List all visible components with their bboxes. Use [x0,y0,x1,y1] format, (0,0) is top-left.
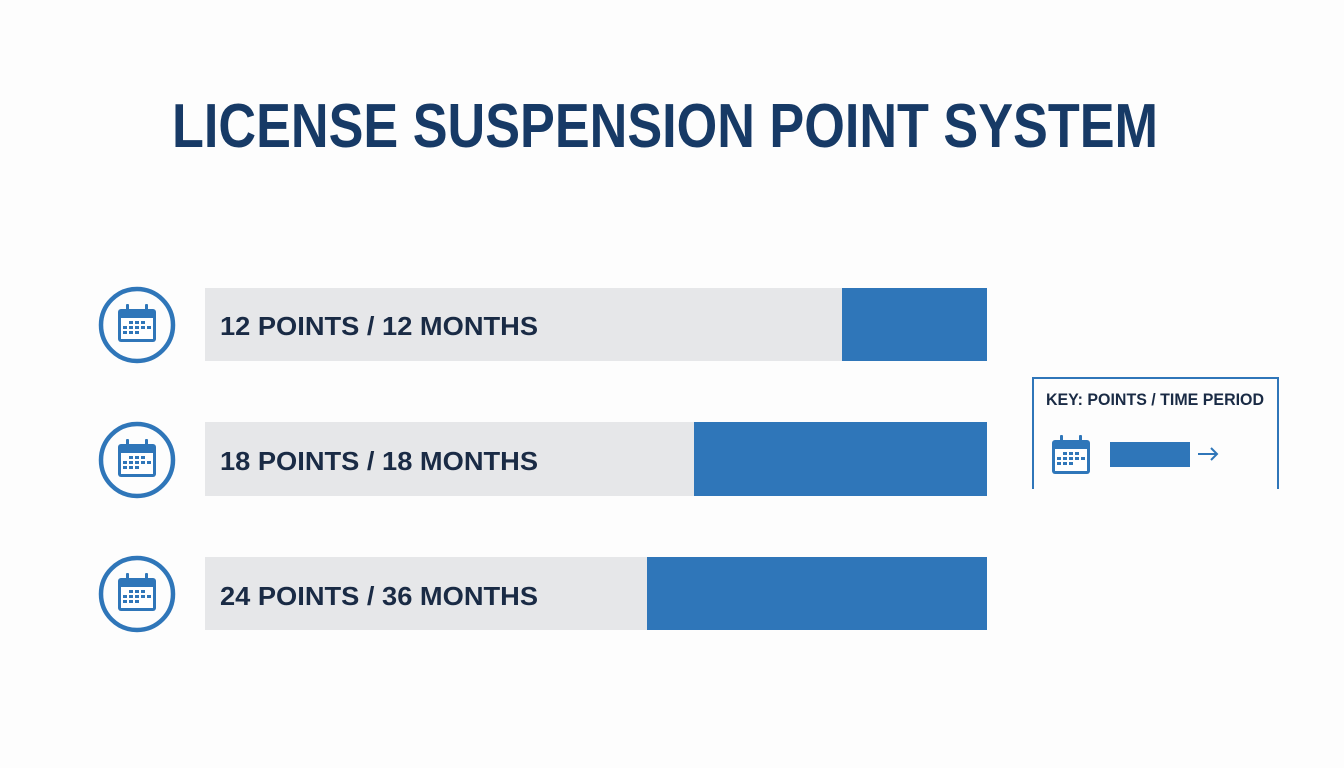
row 1: 12 points / 12 months [101,288,987,361]
bar 1 [205,288,987,361]
key icon: calendar [1052,435,1090,474]
key bar [1110,442,1190,467]
title: LICENSE SUSPENSION POINT SYSTEM [172,92,1158,161]
label 2: 18 POINTS / 18 MONTHS [220,446,538,476]
key arrow [1198,448,1217,460]
bar 2 [205,422,987,496]
label 1: 12 POINTS / 12 MONTHS [220,311,538,341]
key heading: KEY: POINTS / TIME PERIOD [1046,390,1264,409]
icon: calendar circle 1 [101,289,173,361]
bar 3 [205,557,987,630]
row 2: 18 points / 18 months [101,422,987,496]
key panel [1033,378,1278,489]
row 3: 24 points / 36 months [101,557,987,630]
icon: calendar circle 2 [101,424,173,496]
icon: calendar circle 3 [101,558,173,630]
label 3: 24 POINTS / 36 MONTHS [220,581,538,611]
